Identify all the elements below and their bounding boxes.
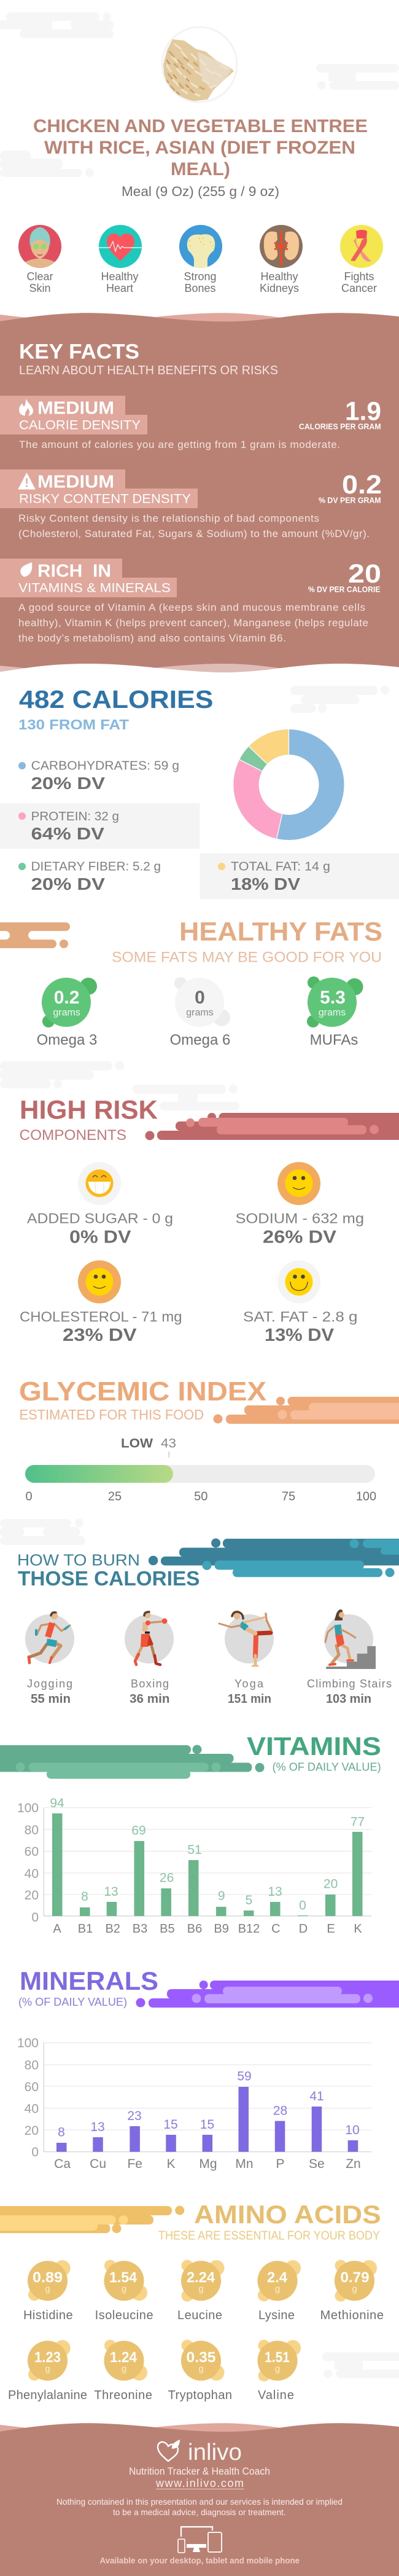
fact: rich in vitamins and minerals xyxy=(0,559,381,644)
fat: mufas: MUFAs xyxy=(310,1032,358,1048)
macro: carbohydrates xyxy=(18,760,179,793)
bar chart: vitamins: B3 xyxy=(133,1922,147,1936)
icon: grin face xyxy=(86,1169,113,1197)
activity: climbing stairs xyxy=(307,1610,392,1706)
fat: omega 3: grams xyxy=(53,1008,80,1018)
activity: jogging: 55 min xyxy=(31,1692,71,1706)
macro: carbohydrates: CARBOHYDRATES: 59 g xyxy=(31,760,179,773)
amino: tryptophan: g xyxy=(198,2363,204,2374)
amino: histidine: Histidine xyxy=(23,2309,73,2322)
bar chart: vitamins: 94 xyxy=(50,1796,64,1810)
decorative banner: burn xyxy=(149,1539,399,1577)
heading: burn xyxy=(17,1551,200,1590)
bar chart: vitamins: B1 xyxy=(78,1922,93,1936)
amino: methionine xyxy=(320,2260,384,2322)
macro: carbohydrates: 20% DV xyxy=(31,774,105,793)
gauge: glycemic value: 25 xyxy=(108,1490,122,1504)
fact: calorie density: 1.9 xyxy=(345,397,381,426)
gauge: glycemic value xyxy=(25,1437,376,1504)
risk: cholesterol: CHOLESTEROL - 71 mg xyxy=(20,1309,182,1325)
title: CHICKEN AND VEGETABLE ENTREE xyxy=(33,116,368,136)
activity: climbing stairs: 103 min xyxy=(326,1692,371,1706)
bar chart: vitamins: 80 xyxy=(25,1823,39,1837)
decorative banner: minerals xyxy=(136,1981,399,2008)
bar chart: minerals: 60 xyxy=(25,2080,39,2094)
icon: healthy heart xyxy=(99,225,142,268)
amino: isoleucine: g xyxy=(122,2283,126,2295)
amino: valine: Valine xyxy=(258,2389,294,2402)
risk: saturated fat xyxy=(243,1260,357,1345)
panel: key facts xyxy=(0,313,399,672)
panel: amino acids xyxy=(0,2200,384,2402)
bar chart: minerals: 100 xyxy=(17,2036,39,2051)
bar chart: minerals: 8 xyxy=(58,2126,65,2140)
bar chart: vitamins: 40 xyxy=(25,1867,39,1881)
background pattern: top blobs xyxy=(0,12,399,177)
heading: healthy fats xyxy=(112,917,382,966)
fact: rich in vitamins and minerals: RICH IN xyxy=(37,562,111,581)
amino: phenylalanine: g xyxy=(45,2363,50,2374)
fact: rich in vitamins and minerals: % DV PER CALORIE xyxy=(308,586,381,594)
bar chart: minerals: Se xyxy=(309,2157,325,2171)
bar chart: vitamins: 26 xyxy=(160,1871,174,1885)
amino: histidine: 0.89 xyxy=(33,2269,63,2286)
bar chart: vitamins: 9 xyxy=(218,1889,225,1903)
fact: rich in vitamins and minerals: A good source of Vitamin A (keeps skin and mucous membrane cells xyxy=(18,602,365,613)
fact: rich in vitamins and minerals: the body’s metabolism) and also contains Vitamin B6. xyxy=(18,632,286,644)
icon: warning triangle xyxy=(18,473,35,489)
risk: sodium: 26% DV xyxy=(263,1228,337,1247)
bar chart: vitamins: C xyxy=(271,1922,281,1936)
benefit labels: Clear xyxy=(26,270,53,283)
risk: cholesterol xyxy=(20,1260,182,1345)
fact: risky content density: (Cholesterol, Saturated Fat, Sugars & Sodium) to the amount (%DV/gr). xyxy=(18,528,370,540)
bar chart: vitamins: 20 xyxy=(323,1877,338,1891)
fact: rich in vitamins and minerals: healthy), Vitamin K (helps prevent cancer), Manganese (helps regulate xyxy=(18,617,368,629)
benefit labels: Healthy xyxy=(101,270,139,283)
fact: calorie density: The amount of calories you are getting from 1 gram is moderate. xyxy=(19,439,340,450)
heading: key facts: KEY FACTS xyxy=(19,340,139,364)
risk: added sugar: 0% DV xyxy=(69,1228,131,1247)
activity: yoga: 151 min xyxy=(228,1692,271,1706)
icon: stairs xyxy=(326,1646,376,1669)
heading: amino acids: AMINO ACIDS xyxy=(194,2200,381,2229)
bar chart: vitamins: 5 xyxy=(246,1893,252,1907)
fact: rich in vitamins and minerals: VITAMINS & MINERALS xyxy=(18,581,171,595)
benefit labels: Fights xyxy=(344,270,374,283)
fact: risky content density xyxy=(0,469,382,540)
benefit labels: Healthy xyxy=(260,270,298,283)
amino: phenylalanine: Phenylalanine xyxy=(8,2389,87,2402)
fat: omega 6: Omega 6 xyxy=(170,1032,230,1048)
background pattern: blobs above burn section xyxy=(0,1518,85,1545)
amino: valine xyxy=(258,2340,301,2402)
benefit labels: Skin xyxy=(29,282,51,294)
macro: total fat: 18% DV xyxy=(231,874,300,893)
panel: calories xyxy=(0,685,399,899)
amino: tryptophan: Tryptophan xyxy=(168,2389,232,2402)
amino: isoleucine: 1.54 xyxy=(109,2269,138,2286)
heading: 482 calories: 482 CALORIES xyxy=(19,685,214,713)
risk: saturated fat: SAT. FAT - 2.8 g xyxy=(243,1309,357,1325)
macro: dietary fiber: 20% DV xyxy=(31,874,105,893)
heading: minerals: MINERALS xyxy=(20,1966,158,1995)
heading: key facts xyxy=(19,340,278,377)
decorative banner: glycemic xyxy=(214,1397,399,1424)
icon: stair climber xyxy=(325,1610,355,1665)
amino: lysine xyxy=(258,2260,301,2322)
amino: methionine: 0.79 xyxy=(340,2269,370,2286)
fat: omega 6: grams xyxy=(186,1008,214,1018)
bar chart: minerals: 28 xyxy=(273,2104,287,2118)
heading: high risk: COMPONENTS xyxy=(20,1127,126,1144)
panel: minerals xyxy=(17,1966,399,2171)
bar chart: minerals: Mn xyxy=(235,2157,254,2171)
fact: risky content density: 0.2 xyxy=(342,470,382,500)
bar chart: vitamins: 0 xyxy=(31,1910,39,1925)
gauge: glycemic value: 50 xyxy=(194,1490,207,1504)
amino: methionine: g xyxy=(352,2283,357,2295)
benefits row xyxy=(18,225,383,294)
bar chart: minerals: Zn xyxy=(346,2157,361,2171)
activity: boxing xyxy=(125,1611,174,1706)
bar chart: vitamins: 13 xyxy=(268,1885,282,1899)
benefit labels: Kidneys xyxy=(260,282,299,294)
benefit labels xyxy=(26,270,377,294)
background pattern: lower right blob xyxy=(322,2352,399,2378)
panel: vitamins xyxy=(0,1732,381,1936)
bar chart: minerals: Ca xyxy=(54,2157,71,2171)
heading: high risk xyxy=(20,1096,158,1144)
amino: phenylalanine: 1.23 xyxy=(34,2349,61,2366)
benefit labels: Cancer xyxy=(341,282,377,294)
amino: lysine: g xyxy=(275,2283,280,2295)
panel: high risk components xyxy=(20,1096,399,1345)
fat: mufas: 5.3 xyxy=(320,988,346,1008)
icon: boxer xyxy=(135,1611,167,1665)
heading: vitamins: (% OF DAILY VALUE) xyxy=(273,1761,381,1773)
bar chart: vitamins: D xyxy=(299,1922,308,1936)
risk: sodium: SODIUM - 632 mg xyxy=(236,1211,364,1227)
bar chart: minerals: Cu xyxy=(90,2157,106,2171)
amino: leucine: g xyxy=(198,2283,204,2295)
amino: leucine: Leucine xyxy=(177,2309,222,2322)
bar chart: minerals: 15 xyxy=(200,2118,214,2132)
risk: added sugar: ADDED SUGAR - 0 g xyxy=(27,1211,173,1227)
icon: clear skin xyxy=(18,225,61,268)
fat: omega 6 xyxy=(170,977,230,1048)
amino: tryptophan: 0.35 xyxy=(187,2349,216,2366)
gauge: glycemic value: LOW xyxy=(121,1437,153,1451)
amino: lysine: 2.4 xyxy=(267,2269,288,2286)
amino: threonine xyxy=(94,2340,152,2402)
heading: glycemic index: GLYCEMIC INDEX xyxy=(19,1376,266,1407)
risk: saturated fat: 13% DV xyxy=(265,1325,335,1345)
bar chart: vitamins: K xyxy=(354,1922,362,1936)
bar chart: vitamins: B12 xyxy=(238,1922,260,1936)
bar chart: minerals: Mg xyxy=(199,2157,217,2171)
fact: rich in vitamins and minerals: 20 xyxy=(348,559,381,589)
amino: isoleucine: Isoleucine xyxy=(95,2309,153,2322)
amino: threonine: 1.24 xyxy=(110,2349,138,2366)
fact: risky content density: % DV PER GRAM xyxy=(319,497,381,505)
heading: amino acids xyxy=(158,2200,381,2242)
bar chart: vitamins: 13 xyxy=(104,1885,118,1899)
risk: cholesterol: 23% DV xyxy=(63,1325,137,1345)
benefit labels: Heart xyxy=(106,282,133,294)
decorative banner: high risk xyxy=(145,1113,399,1141)
heading: healthy fats: HEALTHY FATS xyxy=(179,917,382,947)
activity: climbing stairs: Climbing Stairs xyxy=(307,1678,392,1690)
heading: 482 calories xyxy=(18,685,214,732)
heading: vitamins: VITAMINS xyxy=(247,1732,381,1761)
availability note: Available on your desktop, tablet and mobile phone xyxy=(99,2556,300,2566)
fact: risky content density: Risky Content density is the relationship of bad components xyxy=(18,512,319,524)
heading: vitamins xyxy=(247,1732,381,1773)
amino: leucine: 2.24 xyxy=(187,2269,215,2286)
fact: risky content density: RISKY CONTENT DENSITY xyxy=(19,492,191,506)
fact: calorie density: MEDIUM xyxy=(37,399,114,418)
bar chart: minerals: 40 xyxy=(25,2102,39,2116)
gauge: glycemic value: 75 xyxy=(282,1490,295,1504)
decorative banner: vitamins xyxy=(0,1745,264,1779)
fat: mufas xyxy=(307,976,363,1048)
bar chart: vitamins xyxy=(17,1796,371,1936)
icon: big smile face xyxy=(285,1268,313,1295)
bar chart: minerals: Fe xyxy=(127,2157,142,2171)
title: MEAL) xyxy=(171,159,230,179)
macro: dietary fiber: DIETARY FIBER: 5.2 g xyxy=(31,860,161,874)
bar chart: minerals xyxy=(17,2036,371,2171)
fat: omega 6: 0 xyxy=(195,988,205,1008)
logo: inlivo: inlivo xyxy=(188,2440,242,2465)
icon: runner xyxy=(29,1612,70,1663)
bar chart: vitamins: 77 xyxy=(351,1815,365,1829)
activity: yoga: Yoga xyxy=(234,1678,264,1690)
panel: how to burn those calories xyxy=(17,1539,399,1706)
title: WITH RICE, ASIAN (DIET FROZEN xyxy=(44,138,355,158)
tagline: Nutrition Tracker & Health Coach xyxy=(129,2465,270,2477)
heading: healthy fats: SOME FATS MAY BE GOOD FOR YOU xyxy=(112,949,382,966)
bar chart: vitamins: 69 xyxy=(131,1824,146,1838)
amino: tryptophan xyxy=(168,2340,232,2402)
amino: methionine: Methionine xyxy=(320,2309,384,2322)
macro: protein: 64% DV xyxy=(31,824,104,843)
amino: isoleucine xyxy=(95,2260,153,2322)
amino: leucine xyxy=(177,2260,224,2322)
fat: mufas: grams xyxy=(319,1008,346,1018)
fact: calorie density xyxy=(0,396,381,450)
activity: jogging: Jogging xyxy=(27,1678,72,1690)
gauge: glycemic value: 43 xyxy=(161,1437,176,1451)
activity: boxing: Boxing xyxy=(131,1678,169,1690)
logo: inlivo xyxy=(158,2440,242,2465)
macro: total fat xyxy=(200,854,399,899)
gauge: glycemic value: 100 xyxy=(356,1490,376,1504)
bar chart: minerals: 80 xyxy=(25,2059,39,2073)
bar chart: vitamins: B5 xyxy=(160,1922,175,1936)
risk: added sugar xyxy=(27,1162,173,1247)
disclaimer: to be a medical advice, diagnosis or treatment. xyxy=(113,2507,286,2517)
bar chart: vitamins: 0 xyxy=(299,1899,306,1913)
serving size: Meal (9 Oz) (255 g / 9 oz) xyxy=(122,184,279,199)
heading: burn: HOW TO BURN xyxy=(17,1551,140,1569)
heading: minerals: (% OF DAILY VALUE) xyxy=(18,1996,127,2008)
bar chart: vitamins: B9 xyxy=(214,1922,229,1936)
amino: lysine: Lysine xyxy=(258,2309,295,2322)
fat: omega 3: 0.2 xyxy=(54,988,79,1008)
amino: phenylalanine xyxy=(8,2340,87,2402)
decorative banner: amino acids xyxy=(0,2206,184,2233)
bar chart: minerals: 41 xyxy=(309,2089,324,2103)
activity: jogging xyxy=(25,1612,74,1706)
food image: rice xyxy=(162,27,237,102)
risk: sodium xyxy=(236,1162,364,1247)
bar chart: minerals: 10 xyxy=(345,2123,360,2137)
heading: burn: THOSE CALORIES xyxy=(18,1567,200,1590)
amino: threonine: g xyxy=(122,2363,126,2374)
macro: protein: PROTEIN: 32 g xyxy=(31,810,119,823)
footer xyxy=(0,2423,399,2576)
bar chart: vitamins: 100 xyxy=(17,1801,39,1815)
donut chart xyxy=(234,729,331,839)
amino: threonine: Threonine xyxy=(94,2389,152,2402)
disclaimer: Nothing contained in this presentation and our services is intended or implied xyxy=(56,2497,343,2507)
bar chart: minerals: 23 xyxy=(127,2109,142,2123)
icon: flame xyxy=(19,399,33,415)
bar chart: vitamins: 8 xyxy=(81,1890,88,1904)
bar chart: vitamins: 20 xyxy=(25,1888,39,1903)
icon: smile face xyxy=(86,1268,113,1295)
icon: strong bones xyxy=(179,225,222,268)
bar chart: vitamins: A xyxy=(53,1922,61,1936)
macro: dietary fiber xyxy=(18,860,161,893)
fat: omega 3 xyxy=(37,978,97,1048)
heading: minerals xyxy=(18,1966,158,2008)
icon: smile face xyxy=(285,1169,313,1197)
panel: healthy fats xyxy=(0,917,382,1048)
amino: valine: g xyxy=(275,2363,280,2374)
fat: omega 3: Omega 3 xyxy=(37,1032,97,1048)
bar chart: minerals: 59 xyxy=(237,2070,252,2084)
heading: glycemic index: ESTIMATED FOR THIS FOOD xyxy=(20,1407,204,1423)
fact: calorie density: CALORIE DENSITY xyxy=(19,418,141,433)
activity: boxing: 36 min xyxy=(130,1692,169,1706)
bar chart: minerals: 20 xyxy=(25,2124,39,2138)
icon: devices xyxy=(178,2527,222,2553)
website link: www.inlivo.com xyxy=(155,2477,244,2489)
benefit labels: Strong xyxy=(184,270,217,283)
macro: total fat: TOTAL FAT: 14 g xyxy=(231,860,330,874)
benefit labels: Bones xyxy=(184,282,216,294)
heading: amino acids: THESE ARE ESSENTIAL FOR YOUR BODY xyxy=(158,2229,380,2242)
icon: leaf xyxy=(20,562,32,577)
bar chart: vitamins: B6 xyxy=(187,1922,202,1936)
fact: calorie density: CALORIES PER GRAM xyxy=(299,423,381,431)
panel: glycemic index xyxy=(19,1376,399,1504)
bar chart: vitamins: 51 xyxy=(187,1843,202,1857)
amino: valine: 1.51 xyxy=(265,2349,290,2366)
bar chart: vitamins: 60 xyxy=(25,1845,39,1859)
icon: healthy kidneys xyxy=(260,225,303,268)
gauge: glycemic value: 0 xyxy=(25,1490,33,1504)
fact: risky content density: MEDIUM xyxy=(37,473,114,492)
title xyxy=(33,116,368,179)
background pattern: mid blobs xyxy=(0,1061,239,1110)
macro: protein xyxy=(0,803,200,849)
bar chart: minerals: 15 xyxy=(163,2118,178,2132)
bar chart: minerals: K xyxy=(167,2157,176,2171)
disclaimer xyxy=(56,2497,343,2517)
bar chart: minerals: 13 xyxy=(90,2120,105,2134)
icon: fights cancer xyxy=(340,225,383,268)
bar chart: vitamins: B2 xyxy=(105,1922,120,1936)
icon: yoga pose xyxy=(219,1612,271,1666)
heading: high risk: HIGH RISK xyxy=(20,1096,158,1125)
activity: yoga xyxy=(219,1612,274,1706)
heading: 482 calories: 130 FROM FAT xyxy=(18,717,129,732)
amino: histidine xyxy=(23,2260,73,2322)
heading: key facts: LEARN ABOUT HEALTH BENEFITS OR RISKS xyxy=(19,364,278,377)
bar chart: vitamins: E xyxy=(327,1922,335,1936)
bar chart: minerals: 0 xyxy=(31,2145,39,2159)
heading: glycemic index xyxy=(19,1376,266,1423)
amino: histidine: g xyxy=(45,2283,50,2295)
bar chart: minerals: P xyxy=(276,2157,285,2171)
